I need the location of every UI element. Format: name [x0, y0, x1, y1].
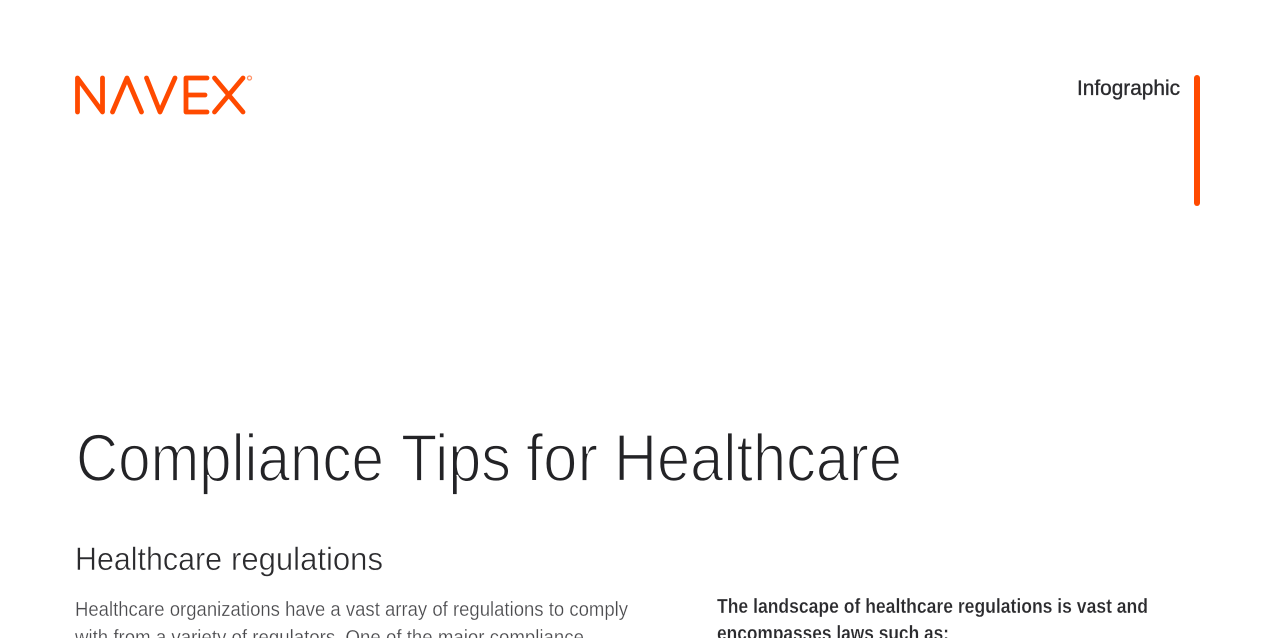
title: for	[526, 421, 598, 496]
title: Tips	[401, 421, 511, 496]
orange accent bar	[1194, 75, 1200, 206]
heading: healthcare regulations	[75, 541, 383, 577]
title: Healthcare	[614, 421, 902, 496]
body text: left column: Healthcare organizations have a vast array of regulations to comply	[75, 599, 628, 621]
title	[76, 421, 902, 496]
document type label: Infographic	[1077, 77, 1180, 100]
body text: right column lead-in: The landscape of healthcare regulations is vast and	[717, 596, 1148, 618]
logo: NAVEX	[78, 76, 252, 112]
body text: right column lead-in	[717, 596, 1148, 638]
title: Compliance	[76, 421, 384, 496]
body text: left column	[74, 599, 628, 638]
heading: healthcare regulations: Healthcare	[75, 541, 222, 577]
heading: healthcare regulations: regulations	[231, 541, 383, 577]
